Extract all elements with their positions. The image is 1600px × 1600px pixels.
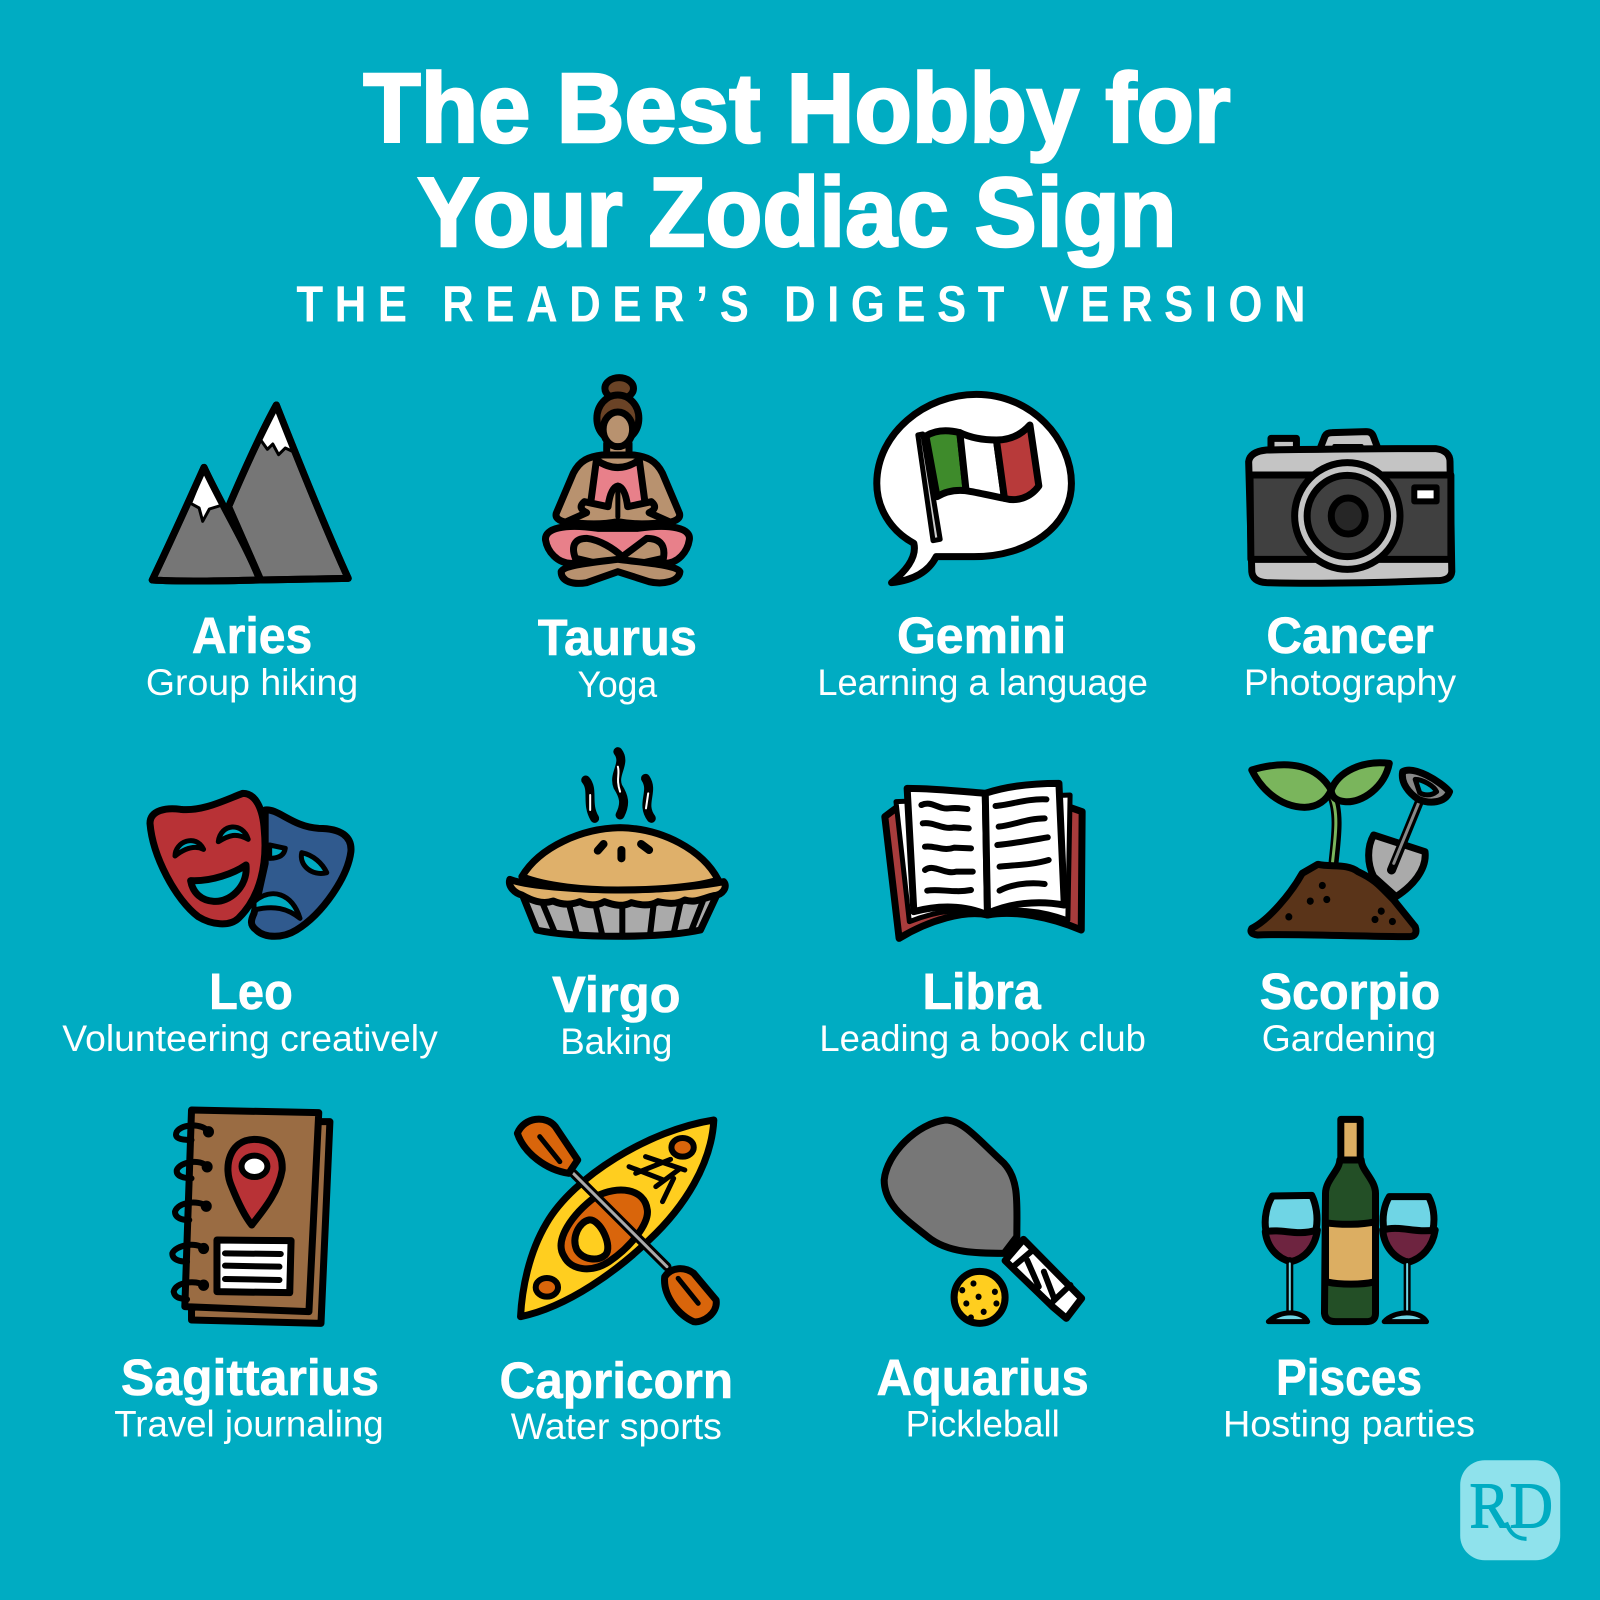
label: Gemini: Gemini [897,607,1066,664]
hobby: Yoga: Yoga [578,664,658,705]
hobby: Pickleball: Pickleball [906,1404,1060,1445]
hobby: Water sports: Water sports [511,1406,722,1447]
panel: Aquarius [877,1120,1089,1445]
panel: Gemini [817,394,1148,703]
label: Pisces: Pisces [1276,1349,1422,1406]
logo: RD badge [1460,1460,1560,1560]
panel: Virgo [509,752,725,1062]
icon: yoga figure [545,378,689,583]
hobby: Learning a language: Learning a language [817,662,1148,703]
hobby: Gardening: Gardening [1262,1018,1436,1059]
hobby: Photography: Photography [1244,662,1457,703]
icon: camera [1249,432,1452,583]
hobby: Baking: Baking [560,1021,672,1062]
label: Virgo: Virgo [552,966,681,1023]
panel: Leo [62,793,438,1059]
icon: pie with steam [509,752,725,937]
icon: pickleball paddle and ball [884,1120,1082,1323]
label: Leo: Leo [209,963,293,1020]
label: Capricorn: Capricorn [499,1352,733,1409]
label: Sagittarius: Sagittarius [121,1349,379,1406]
hobby: Leading a book club: Leading a book club [819,1018,1146,1059]
subtitle: THE READER’S DIGEST VERSION [296,276,1306,333]
label: Taurus: Taurus [538,609,697,666]
icon: kayak and paddle [517,1119,716,1322]
title: The Best Hobby for [363,53,1231,163]
icon: speech bubble with Italian flag [877,394,1071,583]
hobby: Travel journaling: Travel journaling [114,1404,384,1445]
panel: Taurus [538,378,697,705]
icon: theater masks [150,793,351,936]
label: Aries: Aries [192,607,312,664]
panel: Libra [819,783,1146,1059]
panel: Cancer [1244,432,1457,703]
panel: Scorpio [1251,763,1450,1059]
label: Libra: Libra [922,963,1041,1020]
icon: mountains [152,405,348,581]
label: Scorpio: Scorpio [1260,963,1440,1020]
icon: seedling and shovel [1251,763,1450,937]
title: Your Zodiac Sign [417,157,1177,267]
label: Aquarius: Aquarius [877,1349,1089,1406]
icon: open book [885,783,1082,938]
panel: Aries [146,405,358,703]
hobby: Group hiking: Group hiking [146,662,358,703]
hobby: Hosting parties: Hosting parties [1223,1404,1475,1445]
label: Cancer: Cancer [1266,607,1434,664]
panel: Pisces [1223,1119,1475,1445]
title [363,53,1231,267]
logo: RD badge: RD [1469,1471,1553,1543]
hobby: Volunteering creatively: Volunteering creatively [62,1018,438,1059]
panel: Capricorn [499,1119,733,1447]
panel: Sagittarius [114,1110,384,1445]
icon: wine bottle and glasses [1265,1119,1435,1322]
icon: travel journal [172,1110,330,1323]
